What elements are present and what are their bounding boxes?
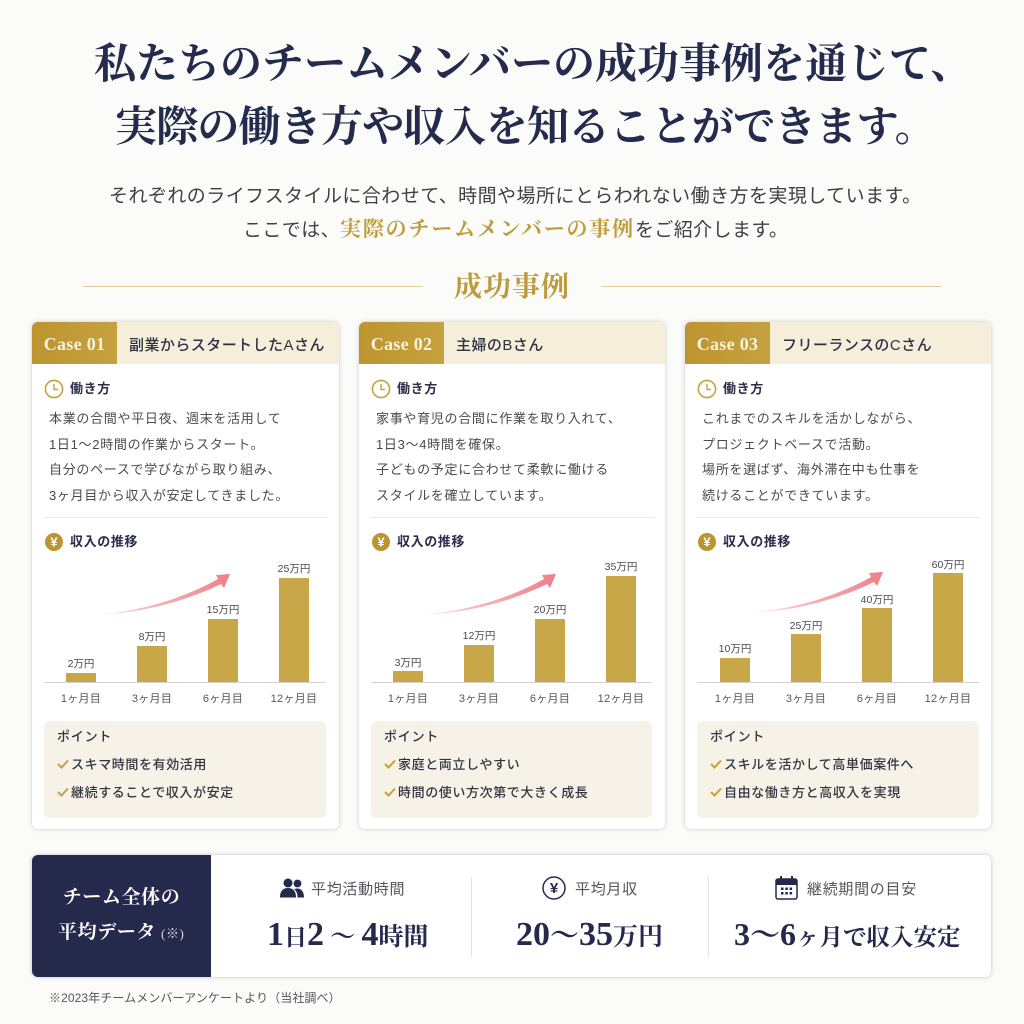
subtitle: それぞれのライフスタイルに合わせて、時間や場所にとらわれない働き方を実現しています。 (109, 186, 922, 207)
stat: average hours: 1日2 ～ 4時間 (267, 916, 429, 953)
navy label block: チーム全体の (63, 887, 180, 908)
points box: 時間の使い方次第で大きく成長 (398, 785, 588, 800)
icon: yen (45, 533, 63, 551)
heading: income trend: 収入の推移 (397, 534, 465, 549)
bar chart (371, 561, 652, 705)
panel: case 03 (685, 322, 991, 829)
icon: yen circle: ¥ (550, 880, 559, 897)
case header: Case 03 (697, 334, 758, 354)
points box (697, 721, 979, 818)
section heading: 成功事例: 成功事例 (454, 272, 570, 303)
points box: ポイント (57, 729, 112, 744)
panel: team average data (32, 855, 991, 977)
bar chart: 12ヶ月目 (598, 693, 644, 705)
title (94, 42, 972, 151)
bar chart (44, 563, 326, 705)
bar chart: 12ヶ月目 (271, 693, 317, 705)
heading: how they work: 働き方 (397, 381, 438, 396)
bar chart: 2万円 (68, 658, 94, 670)
case header: Case 01 (44, 334, 105, 354)
stat: continuation period: 3〜6ヶ月で収入安定 (734, 916, 960, 952)
case header (32, 322, 339, 364)
heading: how they work: 働き方 (723, 381, 764, 396)
bar chart: 6ヶ月目 (530, 693, 570, 705)
icon: calendar (775, 876, 798, 900)
footnote: ※2023年チームメンバーアンケートより（当社調べ） (49, 991, 341, 1005)
stat: continuation period: 継続期間の目安 (807, 881, 917, 898)
points box: 自由な働き方と高収入を実現 (724, 785, 901, 800)
bar chart: 6ヶ月目 (203, 693, 243, 705)
points box (371, 721, 652, 818)
points box: ポイント (384, 729, 439, 744)
icon: yen (372, 533, 390, 551)
bar chart: 20万円 (534, 604, 566, 616)
bar chart (697, 559, 979, 705)
points box: 継続することで収入が安定 (71, 785, 234, 800)
heading: income trend: 収入の推移 (70, 534, 138, 549)
bar chart: 3ヶ月目 (132, 693, 172, 705)
points box: 家庭と両立しやすい (398, 757, 520, 772)
bar chart: 15万円 (207, 604, 239, 616)
work description: 自分のペースで学びながら取り組み、 (49, 462, 281, 477)
work description: 1日3〜4時間を確保。 (376, 437, 509, 452)
subtitle (109, 186, 922, 241)
bar chart: 3ヶ月目 (459, 693, 499, 705)
icon: clock (44, 380, 64, 398)
navy label block (32, 855, 211, 977)
navy label block: 平均データ (※) (58, 922, 184, 943)
points box: ポイント (710, 729, 765, 744)
bar chart: 1ヶ月目 (388, 693, 428, 705)
work description: 1日1〜2時間の作業からスタート。 (49, 437, 264, 452)
work description (49, 411, 289, 503)
icon: clock (372, 380, 390, 398)
icon: yen circle (542, 876, 566, 900)
bar chart: 6ヶ月目 (857, 693, 897, 705)
points box: スキルを活かして高単価案件へ (724, 757, 914, 772)
stat: average hours: 平均活動時間 (311, 881, 405, 898)
work description (702, 411, 921, 503)
work description: 場所を選ばず、海外滞在中も仕事を (702, 462, 920, 477)
case header: フリーランスのCさん (782, 337, 932, 354)
work description (376, 411, 622, 503)
title: 私たちのチームメンバーの成功事例を通じて、 (94, 42, 972, 88)
stat: average monthly income: 平均月収 (575, 881, 638, 898)
case header (685, 322, 991, 364)
stat: average monthly income: 20〜35万円 (516, 916, 663, 953)
points box: スキマ時間を有効活用 (71, 757, 207, 772)
work description: 続けることができています。 (702, 488, 879, 503)
bar chart: 1ヶ月目 (61, 693, 101, 705)
bar chart: 12ヶ月目 (925, 693, 971, 705)
heading: income trend: 収入の推移 (723, 534, 791, 549)
heading: how they work: 働き方 (70, 381, 111, 396)
bar chart: 35万円 (605, 561, 637, 573)
case header: Case 02 (371, 334, 432, 354)
icon: yen: ¥ (50, 534, 58, 550)
bar chart: 25万円 (790, 620, 822, 632)
work description: 3ヶ月目から収入が安定してきました。 (49, 488, 289, 503)
subtitle: ここでは、実際のチームメンバーの事例をご紹介します。 (243, 217, 788, 241)
case header: 主婦のBさん (456, 337, 544, 354)
icon: yen: ¥ (377, 534, 385, 550)
icon: clock (698, 380, 716, 398)
bar chart: 1ヶ月目 (715, 693, 755, 705)
bar chart: 12万円 (463, 630, 495, 642)
work description: スタイルを確立しています。 (376, 488, 552, 503)
bar chart: 40万円 (861, 594, 893, 606)
stat: average hours (267, 878, 429, 953)
points box (44, 721, 326, 818)
work description: 本業の合間や平日夜、週末を活用して (49, 411, 282, 426)
bar chart: 60万円 (932, 559, 964, 571)
stat: continuation period (734, 876, 960, 952)
work description: プロジェクトベースで活動。 (702, 437, 879, 452)
work description: 家事や育児の合間に作業を取り入れて、 (376, 411, 622, 426)
bar chart: 10万円 (719, 643, 751, 655)
bar chart: 8万円 (139, 631, 165, 643)
stat: average monthly income (516, 876, 663, 953)
panel: case 02 (359, 322, 665, 829)
bar chart: 25万円 (278, 563, 310, 575)
panel: case 01 (32, 322, 339, 829)
icon: people (280, 878, 304, 898)
work description: 子どもの予定に合わせて柔軟に働ける (376, 462, 609, 477)
bar chart: 3ヶ月目 (786, 693, 826, 705)
icon: yen (698, 533, 716, 551)
icon: yen: ¥ (703, 534, 711, 550)
bar chart: 3万円 (395, 657, 421, 669)
work description: これまでのスキルを活かしながら、 (702, 411, 921, 426)
case header (359, 322, 665, 364)
case header: 副業からスタートしたAさん (129, 337, 325, 354)
title: 実際の働き方や収入を知ることができます。 (115, 105, 936, 151)
